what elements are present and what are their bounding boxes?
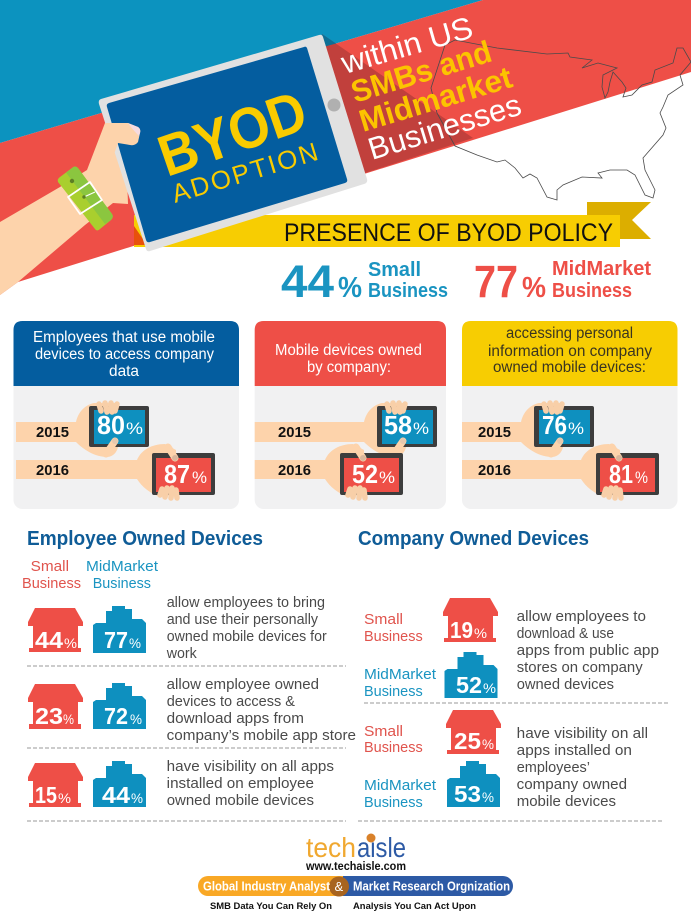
- map of the United States outline: [431, 40, 691, 200]
- heading: company owned devices: Company Owned Devices: [358, 528, 589, 550]
- row: public app stores 19% and 52%: 52: [456, 672, 482, 698]
- logo: techaisle: aisle: [357, 832, 406, 863]
- stat: 77% midmarket business: %: [522, 272, 546, 304]
- tagline pill: global industry analyst and market research organization: [198, 876, 513, 896]
- row: company app store 23% and 72%: %: [63, 711, 74, 727]
- row: public app stores 19% and 52%: %: [483, 680, 496, 696]
- row: visibility on company devices 25% and 53%: have visibility on all: [517, 725, 648, 742]
- slogans: SMB Data You Can Rely On: [210, 901, 332, 912]
- row: public app stores 19% and 52%: stores on company: [517, 659, 643, 676]
- panel: accessing personal information: %: [568, 419, 584, 438]
- row: public app stores 19% and 52%: Business: [364, 628, 423, 645]
- row: visibility on company devices 25% and 53%: company owned: [517, 776, 627, 793]
- panel: employees using mobile devices: Employees that use mobile: [33, 329, 215, 346]
- tagline pill: global industry analyst and market research organization: Global Industry Analyst: [203, 878, 331, 894]
- panel: accessing personal information: %: [635, 468, 648, 487]
- panel: mobile devices owned by company: by company:: [307, 359, 391, 376]
- stat: 77% midmarket business: MidMarket: [552, 258, 651, 280]
- row: public app stores 19% and 52%: owned devices: [517, 676, 614, 693]
- panel: mobile devices owned by company: 2016: [278, 462, 311, 479]
- panel: employees using mobile devices: %: [126, 419, 143, 438]
- headline: within US SMBs and Midmarket Businesses: within US: [336, 10, 477, 81]
- row: bring own devices 44% and 77%: owned mobile devices for: [167, 628, 327, 645]
- row: visibility on company devices 25% and 53%: 25: [454, 728, 481, 754]
- row: public app stores 19% and 52%: apps from public app: [517, 642, 659, 659]
- panel: accessing personal information: 81: [609, 459, 633, 489]
- panel: mobile devices owned by company: Mobile devices owned: [275, 342, 422, 359]
- row: public app stores 19% and 52%: Business: [364, 683, 423, 700]
- row: visibility on company devices 25% and 53%: [364, 710, 648, 811]
- legend: small business and midmarket business: Business: [22, 575, 81, 592]
- row: bring own devices 44% and 77%: work: [166, 645, 197, 662]
- panel: employees using mobile devices: devices to access company: [35, 346, 214, 363]
- panel: employees using mobile devices: %: [192, 468, 207, 487]
- stat: 44% small business: Business: [368, 280, 448, 302]
- row: public app stores 19% and 52%: download & use: [517, 625, 614, 642]
- slogans: [210, 901, 476, 912]
- row: company app store 23% and 72%: allow employee owned: [167, 676, 319, 693]
- panel: accessing personal information: information on company: [488, 343, 652, 360]
- row: visibility on employee devices 15% and 44%: 15: [35, 782, 57, 808]
- legend: small business and midmarket business: [22, 558, 159, 592]
- row: visibility on employee devices 15% and 44%: [28, 758, 334, 809]
- panel: employees using mobile devices: 2016: [36, 462, 69, 479]
- row: visibility on company devices 25% and 53%: Small: [364, 723, 403, 740]
- stat: 44% small business: 44: [281, 256, 334, 307]
- panel: mobile devices owned by company: %: [413, 419, 429, 438]
- panel: mobile devices owned by company: [255, 321, 446, 509]
- tablet with BYOD adoption title: BYOD: [150, 78, 315, 189]
- slogans: Analysis You Can Act Upon: [353, 901, 476, 912]
- row: public app stores 19% and 52%: MidMarket: [364, 666, 437, 683]
- tagline pill: global industry analyst and market research organization: Market Research Orgnization: [353, 878, 510, 894]
- panel: mobile devices owned by company: 58: [384, 410, 412, 440]
- row: visibility on company devices 25% and 53%: %: [482, 736, 494, 752]
- stat: 77% midmarket business: [474, 256, 651, 307]
- heading: employee owned devices: Employee Owned Devices: [27, 528, 263, 550]
- row: bring own devices 44% and 77%: %: [129, 635, 141, 651]
- row: visibility on employee devices 15% and 44%: installed on employee: [167, 775, 314, 792]
- headline: within US SMBs and Midmarket Businesses: Businesses: [364, 87, 525, 167]
- headline: within US SMBs and Midmarket Businesses: SMBs and: [347, 34, 496, 110]
- row: public app stores 19% and 52%: 19: [450, 617, 473, 643]
- row: visibility on company devices 25% and 53%: 53: [454, 781, 481, 807]
- header background bands: [0, 0, 691, 300]
- tagline pill: global industry analyst and market research organization: &: [334, 879, 344, 894]
- panel: employees using mobile devices: 2015: [36, 424, 69, 441]
- row: public app stores 19% and 52%: %: [474, 625, 487, 641]
- row: company app store 23% and 72%: 72: [104, 703, 128, 729]
- row: visibility on company devices 25% and 53%: %: [482, 789, 494, 805]
- row: public app stores 19% and 52%: Small: [364, 611, 403, 628]
- row: company app store 23% and 72%: %: [130, 711, 142, 727]
- panel: accessing personal information: 76: [542, 410, 567, 440]
- row: visibility on company devices 25% and 53%: Business: [364, 739, 423, 756]
- row: company app store 23% and 72%: devices to access &: [167, 693, 295, 710]
- headline: within US SMBs and Midmarket Businesses: [336, 10, 525, 167]
- legend: small business and midmarket business: Business: [93, 575, 151, 592]
- stat: 77% midmarket business: 77: [474, 256, 518, 307]
- row: bring own devices 44% and 77%: %: [64, 635, 77, 651]
- row: company app store 23% and 72%: company’s mobile app store: [167, 727, 356, 744]
- headline: within US SMBs and Midmarket Businesses: Midmarket: [355, 60, 516, 139]
- banner: presence of BYOD policy: PRESENCE OF BYOD POLICY: [284, 219, 613, 247]
- panel: employees using mobile devices: 80: [97, 410, 125, 440]
- logo: techaisle: [306, 832, 406, 863]
- row: visibility on employee devices 15% and 44%: %: [58, 790, 71, 806]
- banner: presence of BYOD policy: [134, 202, 651, 247]
- panel: accessing personal information: 2015: [478, 424, 511, 441]
- panel: mobile devices owned by company: %: [379, 468, 395, 487]
- row: bring own devices 44% and 77%: allow employees to bring: [167, 594, 325, 611]
- panel: accessing personal information: [462, 321, 678, 509]
- row: visibility on company devices 25% and 53%: mobile devices: [517, 793, 616, 810]
- row: visibility on company devices 25% and 53%: apps installed on: [517, 742, 632, 759]
- panel: accessing personal information: accessing personal: [506, 325, 633, 342]
- row: public app stores 19% and 52%: allow employees to: [517, 608, 646, 625]
- row: company app store 23% and 72%: [28, 676, 356, 744]
- row: visibility on company devices 25% and 53%: MidMarket: [364, 777, 437, 794]
- row: visibility on employee devices 15% and 44%: 44: [102, 782, 130, 808]
- row: visibility on company devices 25% and 53%: Business: [364, 794, 423, 811]
- tablet with BYOD adoption title: [99, 35, 367, 251]
- panel: mobile devices owned by company: 52: [352, 459, 378, 489]
- legend: small business and midmarket business: MidMarket: [86, 558, 159, 575]
- panel: employees using mobile devices: [14, 321, 239, 509]
- panel: mobile devices owned by company: 2015: [278, 424, 311, 441]
- row: bring own devices 44% and 77%: and use their personally: [167, 611, 318, 628]
- row: visibility on employee devices 15% and 44%: owned mobile devices: [167, 792, 314, 809]
- website address: www.techaisle.com: [305, 859, 406, 873]
- row: public app stores 19% and 52%: [364, 598, 659, 700]
- stat: 44% small business: Small: [368, 259, 421, 281]
- row: bring own devices 44% and 77%: 44: [35, 627, 63, 653]
- row: bring own devices 44% and 77%: 77: [104, 627, 128, 653]
- panel: employees using mobile devices: 87: [164, 459, 190, 489]
- row: company app store 23% and 72%: download apps from: [167, 710, 304, 727]
- row: visibility on employee devices 15% and 44%: %: [131, 790, 143, 806]
- row: company app store 23% and 72%: 23: [35, 703, 63, 729]
- row: visibility on employee devices 15% and 44%: have visibility on all apps: [167, 758, 334, 775]
- panel: employees using mobile devices: data: [109, 363, 139, 380]
- stat: 77% midmarket business: Business: [552, 280, 632, 302]
- panel: accessing personal information: 2016: [478, 462, 511, 479]
- icon: hand with wristband: [0, 123, 128, 295]
- stat: 44% small business: [281, 256, 448, 307]
- panel: accessing personal information: owned mobile devices:: [493, 359, 646, 376]
- tablet with BYOD adoption title: ADOPTION: [168, 136, 321, 209]
- logo: techaisle: tech: [306, 832, 356, 863]
- row: bring own devices 44% and 77%: [28, 594, 327, 662]
- stat: 44% small business: %: [338, 272, 362, 304]
- legend: small business and midmarket business: Small: [31, 558, 69, 575]
- row: visibility on company devices 25% and 53%: employees’: [517, 759, 590, 776]
